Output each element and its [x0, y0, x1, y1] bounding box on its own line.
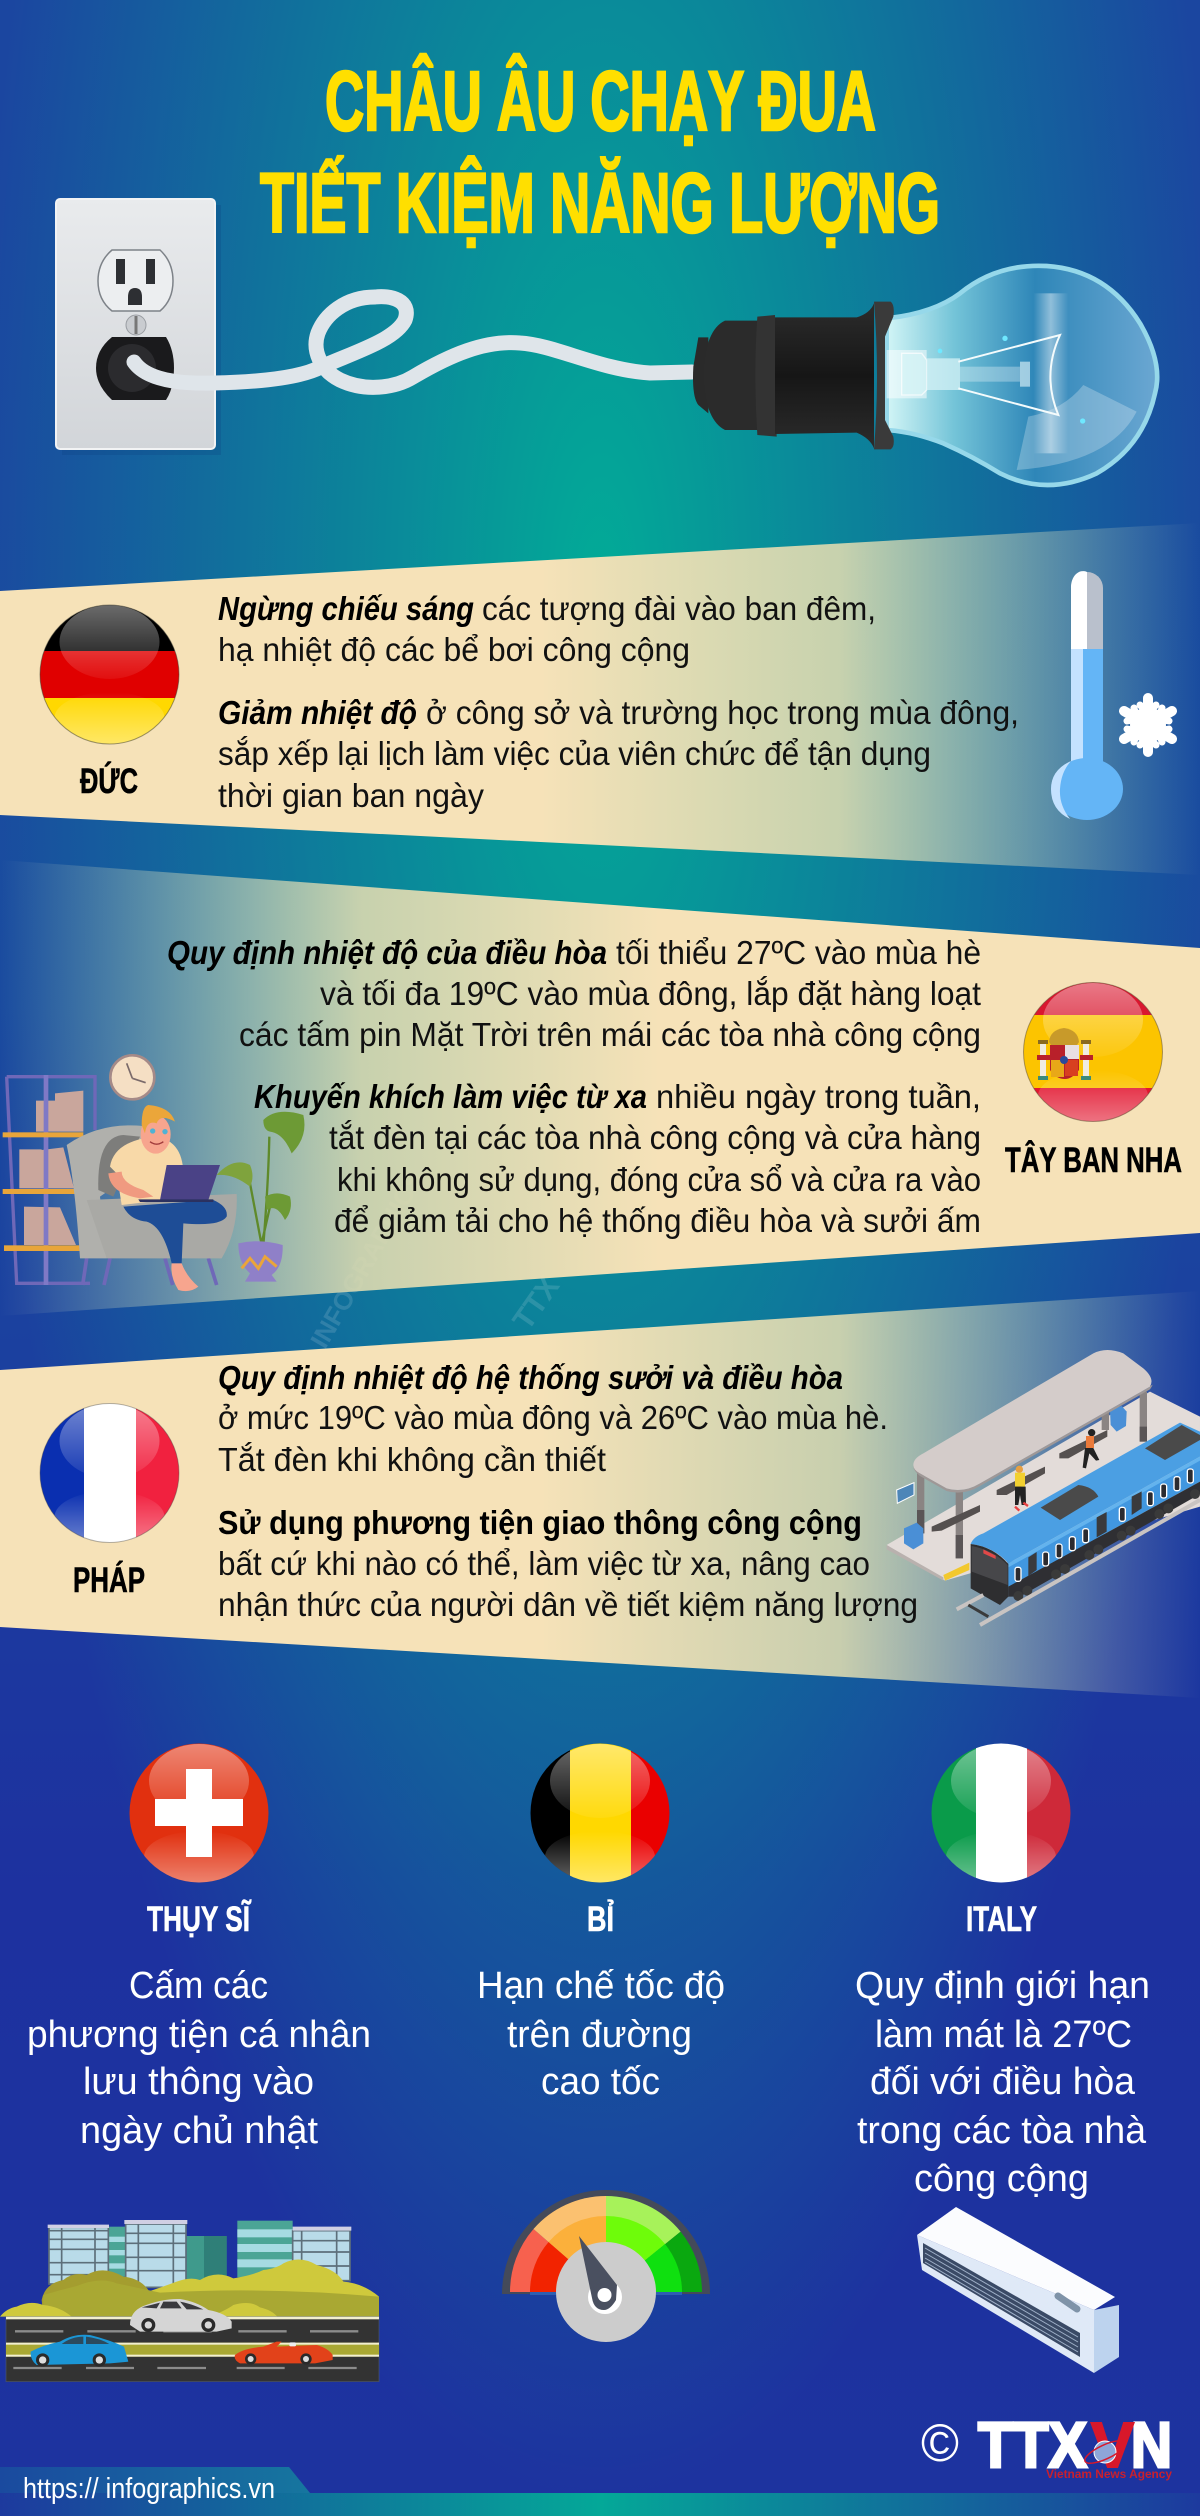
column: Switzerland — [0, 1743, 379, 2382]
panel: Germany — [0, 523, 1200, 875]
text block: Germany measures: Giảm nhiệt độ — [218, 694, 417, 731]
illustration: person working from home — [3, 1055, 304, 1291]
text block: Germany measures: ở công sở và trường học trong mùa đông, — [426, 694, 1019, 731]
logo: TTXVN: V — [1091, 2409, 1134, 2481]
logo: TTXVN: © — [921, 2414, 959, 2473]
label: Italy: ITALY — [966, 1900, 1037, 1939]
cable — [134, 297, 692, 387]
text block: Spain measures: tắt đèn tại các tòa nhà công cộng và cửa hàng — [329, 1119, 981, 1156]
text: Italy measure: Quy định giới hạn — [855, 1965, 1150, 2007]
logo: TTXVN: N — [1131, 2409, 1172, 2481]
text block: Germany measures — [218, 590, 1019, 814]
icon: thermometer — [1051, 571, 1123, 820]
text block: France measures: Tắt đèn khi không cần thiết — [218, 1441, 606, 1478]
text: Italy measure: đối với điều hòa — [870, 2061, 1136, 2103]
label: Đức: ĐỨC — [80, 761, 138, 801]
text block: France measures: Sử dụng phương tiện giao thông công cộng — [218, 1504, 862, 1541]
text: Switzerland measure: lưu thông vào — [83, 2061, 314, 2103]
illustration: city road with cars — [0, 2220, 379, 2382]
text: Switzerland measure: phương tiện cá nhân — [27, 2014, 371, 2056]
icon: air conditioner — [917, 2207, 1119, 2373]
watermarks — [304, 1165, 566, 1353]
illustration: train station — [887, 1350, 1200, 1625]
text block: Spain measures: Khuyến khích làm việc từ xa — [254, 1078, 647, 1115]
icon: snowflake — [1124, 698, 1172, 752]
watermarks: INFOGRAPHICS — [304, 1165, 430, 1353]
text: Belgium measure: trên đường — [507, 2014, 692, 2056]
flag: Spain — [1023, 982, 1163, 1122]
text: Belgium measure: Hạn chế tốc độ — [477, 1965, 725, 2007]
text block: France measures: bất cứ khi nào có thể, làm việc từ xa, nâng cao — [218, 1545, 870, 1582]
flag: Germany — [40, 605, 180, 744]
text: Italy measure: trong các tòa nhà — [857, 2110, 1147, 2152]
flag: Italy — [931, 1743, 1072, 1883]
label: Thụy Sĩ: THỤY SĨ — [147, 1900, 252, 1939]
panel: France — [0, 1291, 1200, 1698]
text block: Spain measures: các tấm pin Mặt Trời trên mái các tòa nhà công cộng — [239, 1016, 981, 1053]
text: Switzerland measure — [27, 1965, 371, 2152]
logo: TTXVN — [921, 2409, 1172, 2481]
text block: Spain measures — [167, 934, 981, 1239]
text block: Spain measures: Quy định nhiệt độ của điều hòa — [167, 934, 607, 971]
icon: wall outlet with plug — [56, 199, 221, 455]
text: Belgium measure — [477, 1965, 725, 2103]
footer url: https:// infographics.vn — [23, 2473, 275, 2505]
panel: Spain — [0, 860, 1200, 1316]
text block: France measures: Quy định nhiệt độ hệ thống sưởi và điều hòa — [218, 1359, 843, 1396]
flag: Switzerland — [129, 1743, 269, 1883]
text: Italy measure: làm mát là 27ºC — [875, 2014, 1132, 2056]
text: Switzerland measure: ngày chủ nhật — [80, 2110, 318, 2152]
text block: Germany measures: các tượng đài vào ban đêm, — [482, 590, 876, 627]
icon: light bulb — [693, 266, 1157, 485]
title — [260, 54, 940, 250]
logo: TTXVN: Vietnam News Agency — [1046, 2467, 1172, 2481]
text: Italy measure — [855, 1965, 1150, 2200]
text block: France measures: nhận thức của người dân về tiết kiệm năng lượng — [218, 1586, 918, 1623]
label: Pháp: PHÁP — [73, 1560, 145, 1600]
text block: Spain measures: để giảm tải cho hệ thống điều hòa và sưởi ấm — [334, 1202, 981, 1239]
text: Switzerland measure: Cấm các — [129, 1965, 268, 2007]
text block: Spain measures: tối thiểu 27ºC vào mùa hè — [616, 934, 981, 971]
flag: France — [40, 1403, 180, 1543]
label: Bỉ: BỈ — [587, 1899, 614, 1939]
text: Belgium measure: cao tốc — [541, 2061, 660, 2103]
text block: Spain measures: nhiều ngày trong tuần, — [656, 1078, 981, 1115]
logo: TTXVN: TTX — [978, 2409, 1087, 2481]
flag: Belgium — [530, 1743, 670, 1883]
column: Belgium — [477, 1743, 725, 2342]
text block: Germany measures: thời gian ban ngày — [218, 777, 484, 814]
text block: France measures: ở mức 19ºC vào mùa đông và 26ºC vào mùa hè. — [218, 1399, 888, 1436]
text block: Germany measures: hạ nhiệt độ các bể bơi công cộng — [218, 631, 690, 668]
column: Italy — [855, 1743, 1150, 2373]
text block: Spain measures: khi không sử dụng, đóng cửa sổ và cửa ra vào — [337, 1161, 981, 1198]
watermarks: TTX — [507, 1271, 566, 1336]
text block: Spain measures: và tối đa 19ºC vào mùa đông, lắp đặt hàng loạt — [320, 975, 981, 1012]
text block: Germany measures: sắp xếp lại lịch làm việc của viên chức để tận dụng — [218, 735, 931, 772]
text block: France measures — [218, 1359, 918, 1623]
title: CHÂU ÂU CHẠY ĐUA — [325, 54, 876, 148]
text: Italy measure: công cộng — [914, 2158, 1089, 2200]
text block: Germany measures: Ngừng chiếu sáng — [218, 590, 474, 627]
footer band — [0, 2467, 1200, 2516]
icon: speed gauge — [502, 2190, 710, 2342]
